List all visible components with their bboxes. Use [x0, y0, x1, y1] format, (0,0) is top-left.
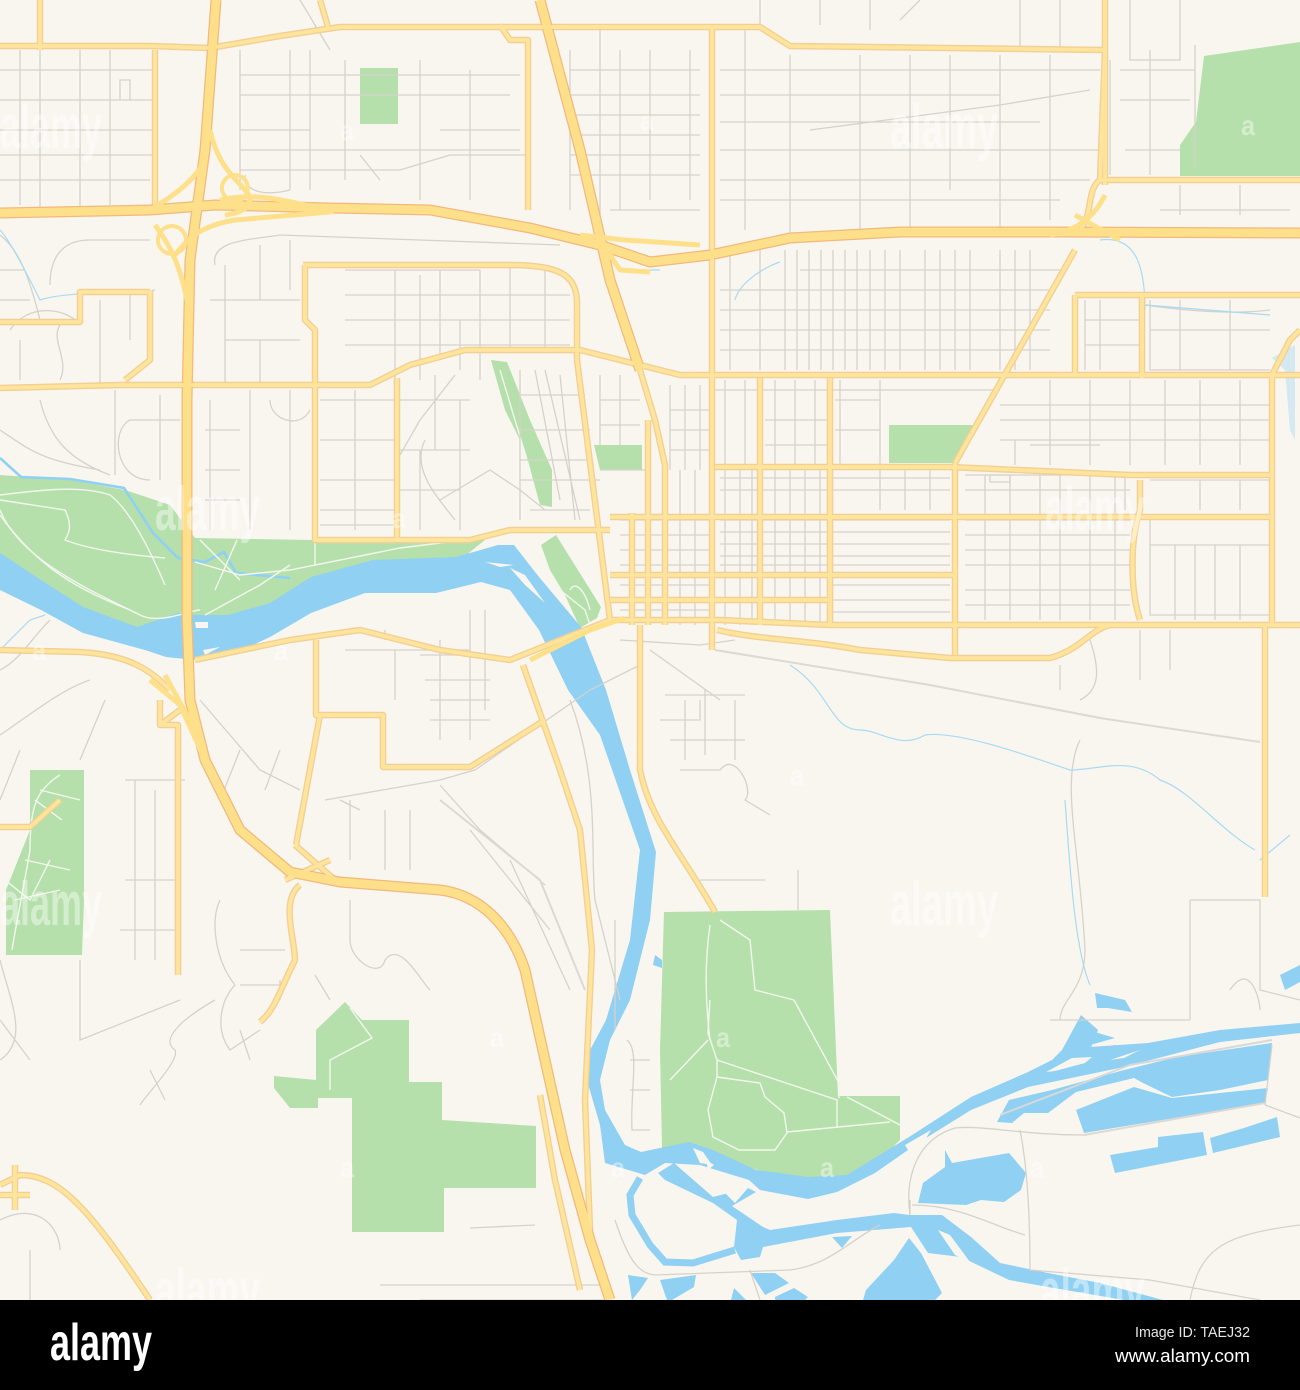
watermarks: alamy	[890, 93, 998, 162]
website: www.alamy.com	[1114, 1346, 1250, 1366]
watermarks: alamy	[1045, 475, 1145, 544]
watermarks: a	[340, 115, 354, 146]
watermarks: a	[32, 635, 46, 666]
watermarks: a	[392, 503, 406, 534]
watermarks: a	[340, 1152, 354, 1183]
watermarks: a	[640, 105, 654, 136]
watermarks: alamy	[0, 93, 102, 162]
watermarks: a	[1030, 1152, 1044, 1183]
park trails	[0, 370, 900, 1150]
footer logo: alamy	[50, 1314, 152, 1372]
watermarks: alamy	[0, 870, 102, 939]
watermarks: a	[1241, 110, 1255, 141]
railway lines	[440, 650, 1272, 1135]
water: rivers and ponds	[0, 345, 1300, 1300]
watermarks: alamy	[155, 1257, 260, 1326]
streams	[0, 230, 1290, 985]
image id: Image ID: TAEJ32	[1135, 1324, 1250, 1341]
watermarks: a	[611, 1152, 625, 1183]
footer bar	[0, 1300, 1300, 1390]
watermarks: a	[716, 1022, 730, 1053]
watermarks: a	[274, 635, 288, 666]
watermarks: alamy	[1040, 1257, 1145, 1326]
watermarks: a	[820, 1152, 834, 1183]
watermarks: alamy	[890, 870, 998, 939]
land islands inside water	[195, 562, 1140, 1262]
watermarks: alamy	[155, 475, 260, 544]
watermarks: a	[490, 1022, 504, 1053]
watermarks: a	[790, 760, 804, 791]
